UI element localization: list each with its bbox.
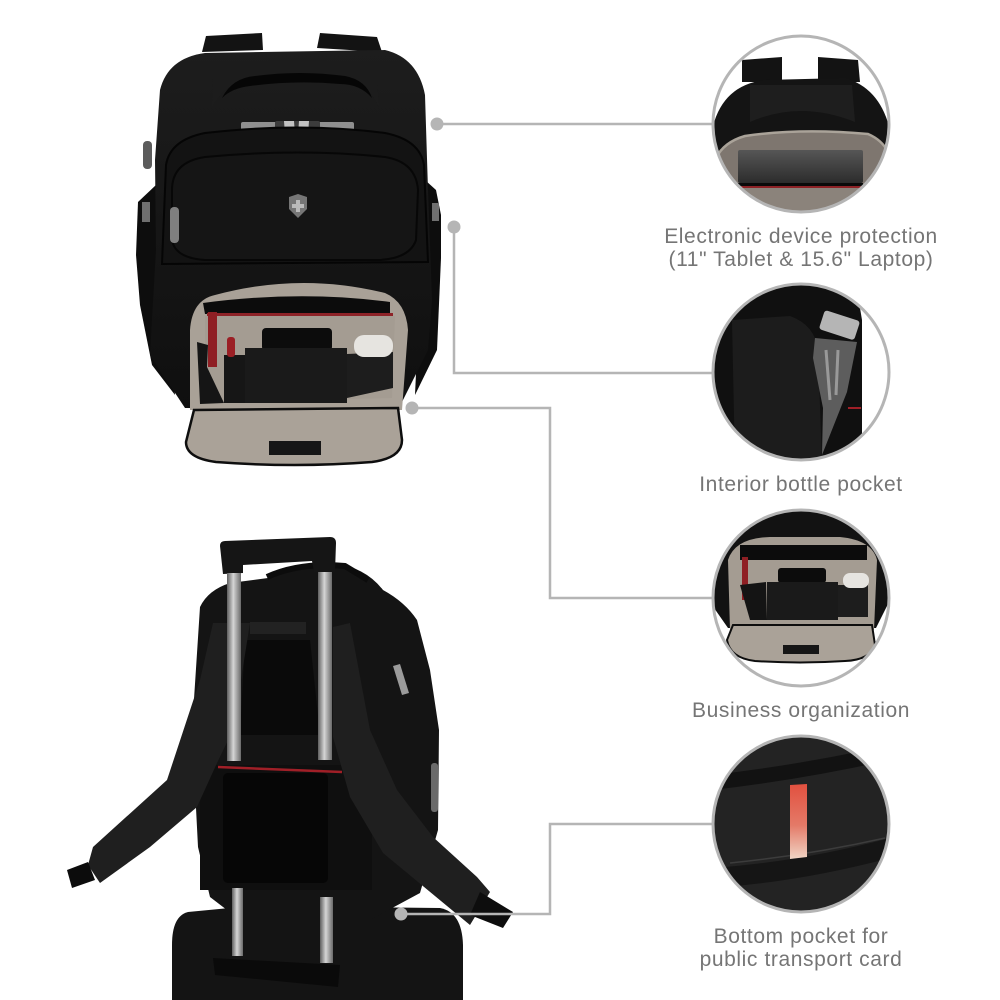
backpack front view <box>136 33 441 465</box>
caption: device protection: (11" Tablet & 15.6" Laptop) <box>668 248 934 271</box>
flap <box>186 408 402 465</box>
top handle loop <box>267 565 368 580</box>
right strap <box>333 623 490 925</box>
caption: device protection <box>664 225 938 271</box>
detail circle: device protection <box>712 35 890 213</box>
back padding <box>240 640 320 735</box>
caption: transport card <box>700 925 902 971</box>
main body <box>150 50 432 410</box>
suitcase <box>172 907 463 1000</box>
pack body <box>192 564 439 920</box>
side pockets <box>136 185 175 395</box>
front pocket <box>162 128 428 264</box>
caption: transport card: Bottom pocket for <box>714 925 888 948</box>
caption: transport card: public transport card <box>700 948 902 971</box>
caption: device protection: Electronic device protection <box>664 225 938 248</box>
detail circle: transport card pocket <box>712 736 890 914</box>
right buckle <box>470 892 513 928</box>
caption: organization: Business organization <box>692 699 910 722</box>
connector lines <box>401 124 712 914</box>
top straps <box>202 33 382 52</box>
backpack rear view on luggage <box>67 537 513 1000</box>
left buckle <box>67 862 95 888</box>
top handle <box>212 60 379 108</box>
left strap <box>88 623 250 883</box>
side zip and badge <box>393 664 409 695</box>
telescopic handle <box>220 537 336 574</box>
detail circle: organization <box>712 510 890 688</box>
suitcase handle recess <box>213 958 340 987</box>
connector dots <box>394 118 460 920</box>
organizer pouches <box>208 312 217 367</box>
back sleeve <box>200 765 372 890</box>
zipper pull <box>241 122 354 133</box>
side zip pulls <box>170 207 179 243</box>
detail circle: bottle pocket <box>712 284 890 462</box>
logo shield <box>289 194 307 218</box>
caption: bottle pocket: Interior bottle pocket <box>699 473 903 496</box>
open compartment <box>190 283 408 410</box>
